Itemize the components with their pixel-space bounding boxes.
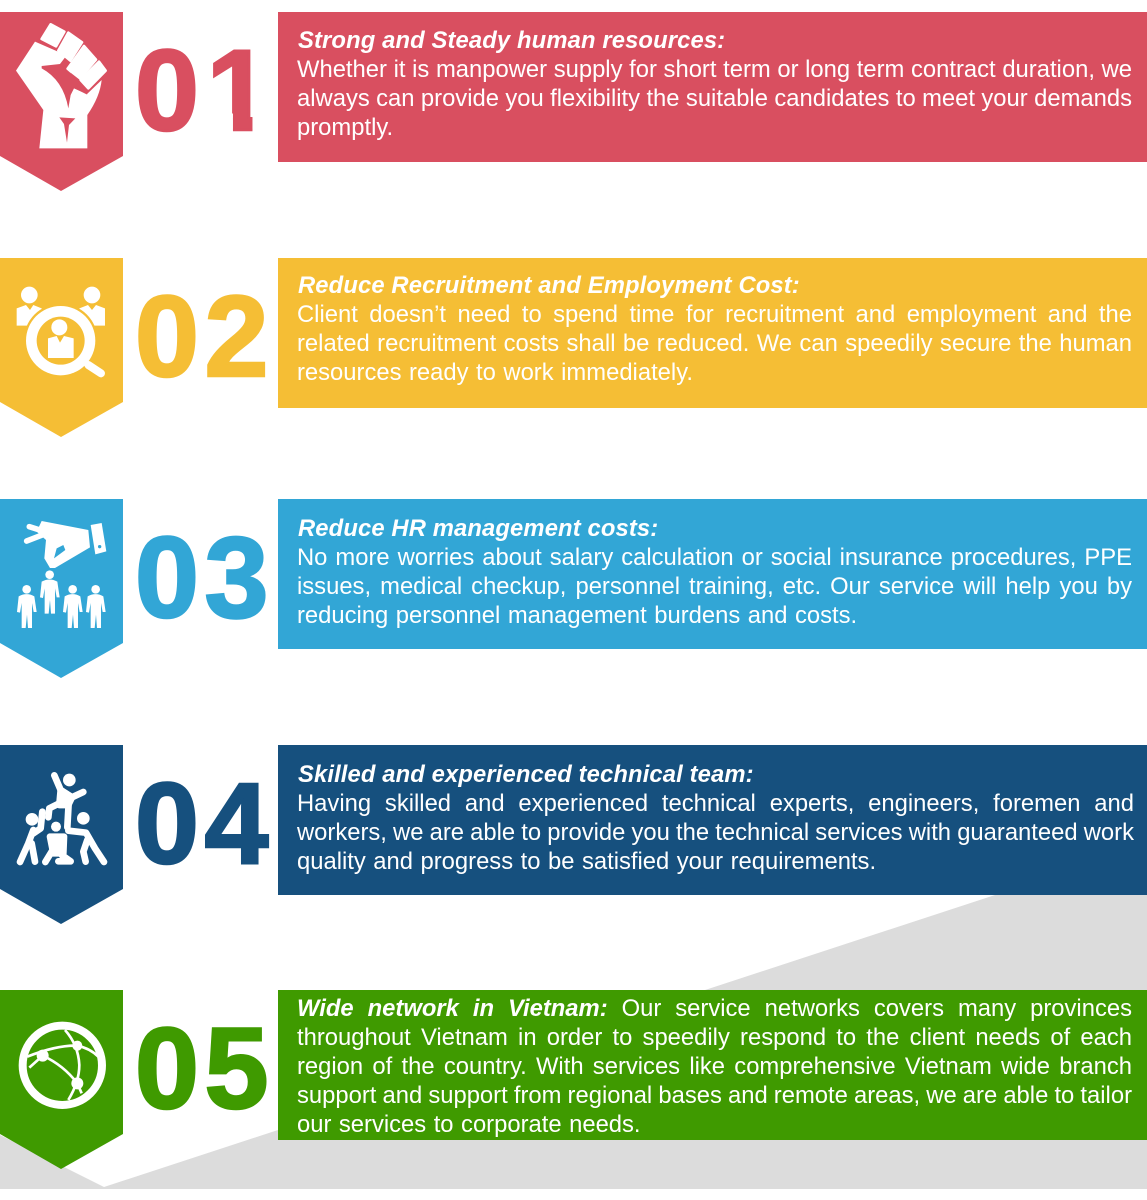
- panel text: resources ready to work immediately.: [297, 359, 693, 386]
- number 03: 03: [135, 514, 274, 642]
- panel text: [297, 27, 1132, 141]
- panel text: Reduce Recruitment and Employment Cost:: [298, 272, 800, 299]
- panel text: related recruitment costs shall be reduced. We can speedily secure the human: [297, 330, 1132, 357]
- panel: wide network in vietnam: [278, 990, 1147, 1140]
- panel: reduce hr management costs: [278, 499, 1147, 649]
- panel text: reducing personnel management burdens and costs.: [297, 602, 857, 629]
- panel text: always can provide you flexibility the suitable candidates to meet your demands: [297, 85, 1132, 112]
- panel text: workers, we are able to provide you the technical services with guaranteed work: [297, 819, 1134, 846]
- panel text: [297, 515, 1132, 629]
- panel text: promptly.: [297, 114, 393, 141]
- panel text: Skilled and experienced technical team:: [298, 761, 754, 788]
- row 02: reduce recruitment and employment cost: [0, 258, 1147, 437]
- panel text: quality and progress to be satisfied your requirements.: [297, 848, 876, 875]
- pennant with human pyramid icon: [0, 745, 123, 924]
- panel text: Client doesn’t need to spend time for recruitment and employment and the: [297, 301, 1132, 328]
- panel text: throughout Vietnam in order to speedily respond to the client needs of each: [297, 1024, 1132, 1051]
- row 03: reduce hr management costs: [0, 499, 1147, 678]
- number 02: 02: [135, 272, 274, 400]
- pennant with fist icon: [0, 12, 123, 191]
- row 05: wide network in vietnam: [0, 990, 1147, 1169]
- row 04: skilled and experienced technical team: [0, 745, 1147, 924]
- panel: reduce recruitment and employment cost: [278, 258, 1147, 408]
- pennant with hand picking person icon: [0, 499, 123, 678]
- number 05: 05: [135, 1004, 274, 1132]
- pennant with search people icon: [0, 258, 123, 437]
- pennant with globe network icon: [0, 990, 123, 1169]
- panel text: Wide network in Vietnam: Our service networks covers many provinces: [297, 995, 1132, 1022]
- number 04: 04: [135, 760, 274, 888]
- panel text: [297, 995, 1132, 1138]
- panel text: Having skilled and experienced technical experts, engineers, foremen and: [297, 790, 1134, 817]
- number 01: 0: [135, 26, 204, 154]
- panel text: issues, medical checkup, personnel training, etc. Our service will help you by: [297, 573, 1132, 600]
- panel text: Strong and Steady human resources:: [298, 27, 725, 54]
- panel text: Reduce HR management costs:: [298, 515, 658, 542]
- row 01: strong and steady human resources: [0, 12, 1147, 191]
- panel text: region of the country. With services like comprehensive Vietnam wide branch: [297, 1053, 1132, 1080]
- panel text: [297, 761, 1134, 875]
- panel text: support and support from regional bases and remote areas, we are able to tailor: [297, 1082, 1132, 1109]
- panel text: [297, 272, 1132, 386]
- panel: skilled and experienced technical team: [278, 745, 1147, 895]
- panel: strong and steady human resources: [278, 12, 1147, 162]
- panel text: Whether it is manpower supply for short term or long term contract duration, we: [297, 56, 1132, 83]
- number 01: 1: [206, 26, 276, 154]
- panel text: No more worries about salary calculation or social insurance procedures, PPE: [297, 544, 1132, 571]
- number 01: [135, 26, 252, 154]
- panel text: our services to corporate needs.: [297, 1111, 641, 1138]
